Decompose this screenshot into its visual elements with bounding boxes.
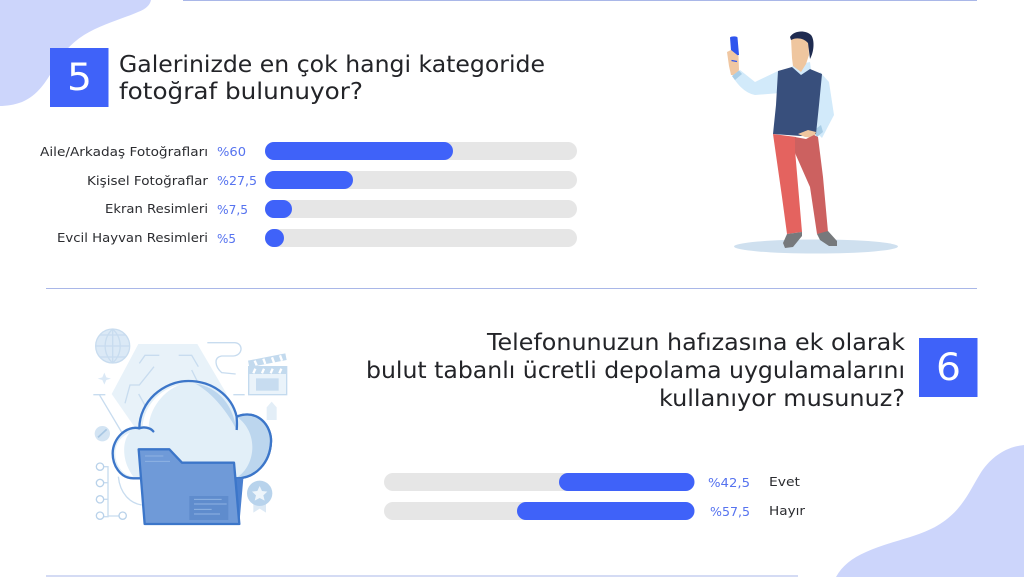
section 5 heading [50, 48, 545, 107]
phone [730, 36, 739, 57]
decorative blob: bottom right [836, 445, 1024, 577]
row: Ekran [105, 200, 577, 218]
row: Evet: Evet [769, 475, 800, 489]
question 5 text: Galerinizde en çok hangi kategoride [119, 52, 545, 78]
bar chart: photo categories [40, 142, 577, 247]
question 6 text: bulut tabanlı ücretli depolama uygulamalarını [366, 358, 905, 384]
left shoe [783, 232, 802, 248]
clapperboard [248, 353, 287, 395]
question 6 text [366, 330, 906, 412]
section 6 heading [366, 330, 978, 412]
hand in pocket [798, 130, 816, 138]
question 5 text: fotoğraf bulunuyor? [119, 79, 363, 105]
number badge 6 [919, 338, 978, 397]
hair [790, 31, 814, 59]
collar [792, 62, 811, 75]
cloud [113, 381, 271, 478]
decorative blob: top left [0, 0, 151, 106]
number badge 6: 6 [936, 346, 961, 389]
number badge 5 [50, 48, 108, 107]
question 6 text: Telefonunuzun hafızasına ek olarak [486, 330, 906, 356]
row: Ekran: Ekran Resimleri [105, 201, 208, 216]
row: Kişisel [87, 171, 577, 189]
row: Aile/Arkadaş: %60 [217, 144, 246, 159]
bar chart: cloud storage usage [384, 473, 805, 520]
number badge 5: 5 [67, 56, 92, 99]
row: Aile/Arkadaş: Aile/Arkadaş Fotoğrafları [40, 144, 208, 159]
right leg [795, 135, 828, 234]
raised arm [732, 70, 780, 95]
row: Hayır: Hayır [769, 504, 805, 518]
row: Ekran: %7,5 [217, 202, 248, 217]
folder [139, 449, 239, 524]
left leg [773, 134, 802, 234]
row: Hayır [384, 502, 805, 520]
medal [247, 481, 272, 513]
row: Kişisel: %27,5 [217, 173, 257, 188]
vest [773, 67, 822, 136]
background hexagon [112, 344, 227, 430]
row: Aile/Arkadaş [40, 142, 577, 160]
row: Kişisel: Kişisel Fotoğraflar [87, 173, 209, 188]
illustration: man taking selfie [727, 31, 898, 254]
row: Evet [384, 473, 800, 491]
row: Evcil Hayvan [57, 229, 577, 247]
other arm [812, 72, 834, 138]
row: Evcil Hayvan: %5 [217, 231, 236, 246]
face [791, 38, 809, 72]
row: Hayır: %57,5 [710, 504, 750, 519]
question 6 text: kullanıyor musunuz? [659, 386, 905, 412]
row: Evcil Hayvan: Evcil Hayvan Resimleri [57, 230, 208, 245]
raised hand [727, 50, 739, 75]
illustration: cloud and folder [93, 329, 287, 524]
right shoe [817, 231, 837, 246]
row: Evet: %42,5 [708, 475, 750, 490]
question 5 text [119, 52, 545, 105]
